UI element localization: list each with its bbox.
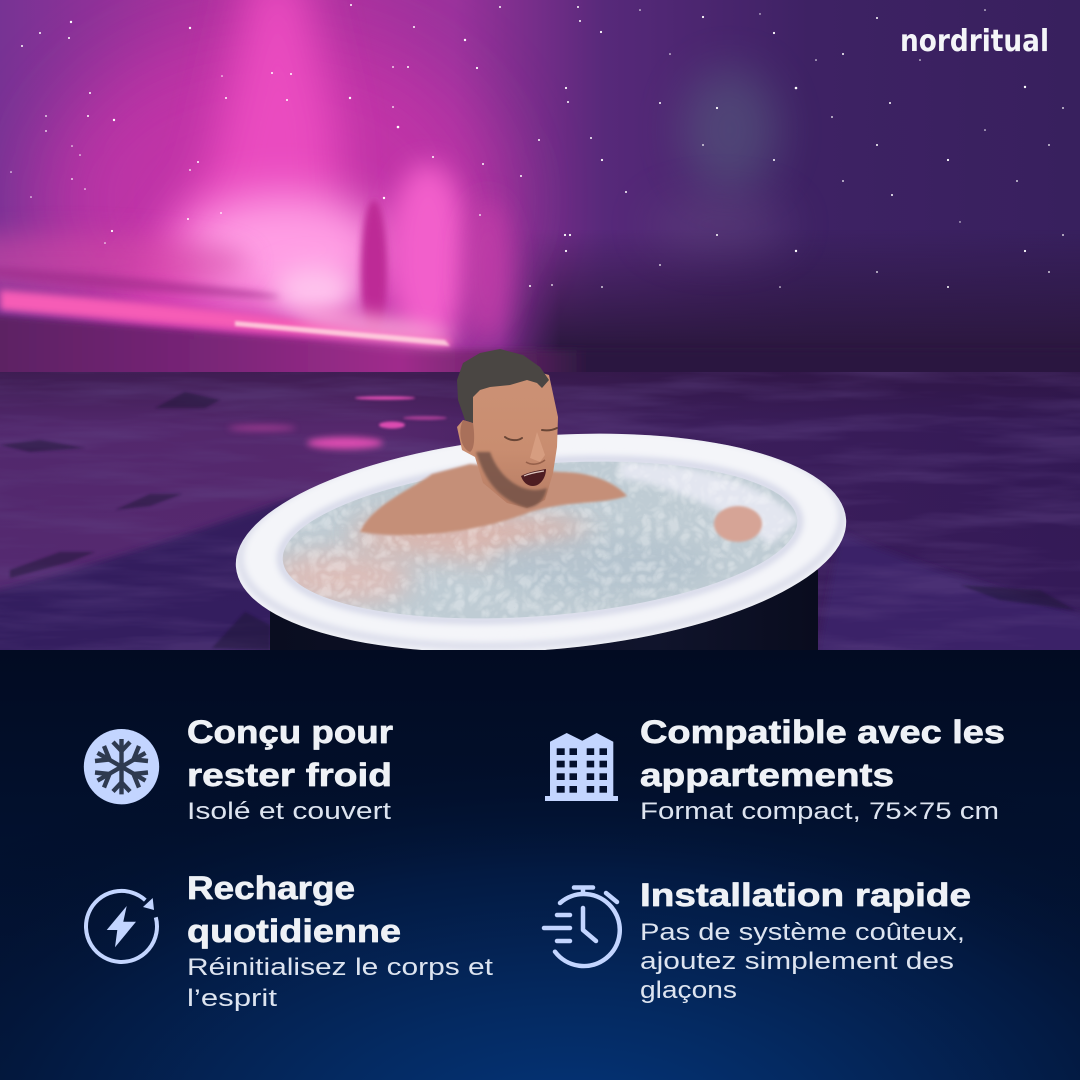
man: torso and shoulders <box>360 464 762 542</box>
heading: Recharge <box>187 870 355 906</box>
heading: Installation rapide <box>640 877 971 913</box>
man: head <box>457 349 558 508</box>
feature: apartment compatible <box>545 714 1005 825</box>
description: Format compact, 75×75 cm <box>640 798 999 825</box>
heading <box>187 714 393 793</box>
description: ajoutez simplement des <box>640 948 954 975</box>
stars <box>10 4 1064 288</box>
description <box>640 919 965 1004</box>
ice bath tub <box>228 349 854 674</box>
bright horizon glow <box>0 290 455 346</box>
inflatable rim <box>236 434 846 650</box>
dunes <box>0 496 296 650</box>
icon: building <box>545 733 618 801</box>
description: l’esprit <box>187 985 277 1012</box>
description: Réinitialisez le corps et <box>187 954 493 981</box>
feature: quick setup <box>544 877 971 1004</box>
heading: rester froid <box>187 757 392 793</box>
heading: Conçu pour <box>187 714 393 750</box>
heading <box>187 870 401 949</box>
logo: nordritual: nordritual <box>900 24 1049 59</box>
tub body <box>270 570 818 650</box>
feature: daily recharge <box>86 870 493 1012</box>
icon: stopwatch <box>544 888 620 966</box>
heading <box>640 714 1005 793</box>
heading: Compatible avec les <box>640 714 1005 750</box>
description: Pas de système coûteux, <box>640 919 965 946</box>
sky with aurora <box>0 0 1080 400</box>
icon: recharge bolt <box>86 891 157 962</box>
heading: appartements <box>640 757 894 793</box>
icon: snowflake <box>84 729 159 804</box>
description <box>187 954 493 1012</box>
dark snow ridges <box>0 392 1075 650</box>
horizon band <box>0 312 576 372</box>
snowy ground <box>0 372 1080 670</box>
description: Isolé et couvert <box>187 798 391 825</box>
panel: features <box>0 650 1080 1080</box>
description: glaçons <box>640 977 737 1004</box>
ice <box>282 462 798 618</box>
man: hand <box>714 506 762 542</box>
pink reflection on water <box>228 396 447 449</box>
heading: quotidienne <box>187 913 401 949</box>
feature: designed to stay cold <box>84 714 393 825</box>
